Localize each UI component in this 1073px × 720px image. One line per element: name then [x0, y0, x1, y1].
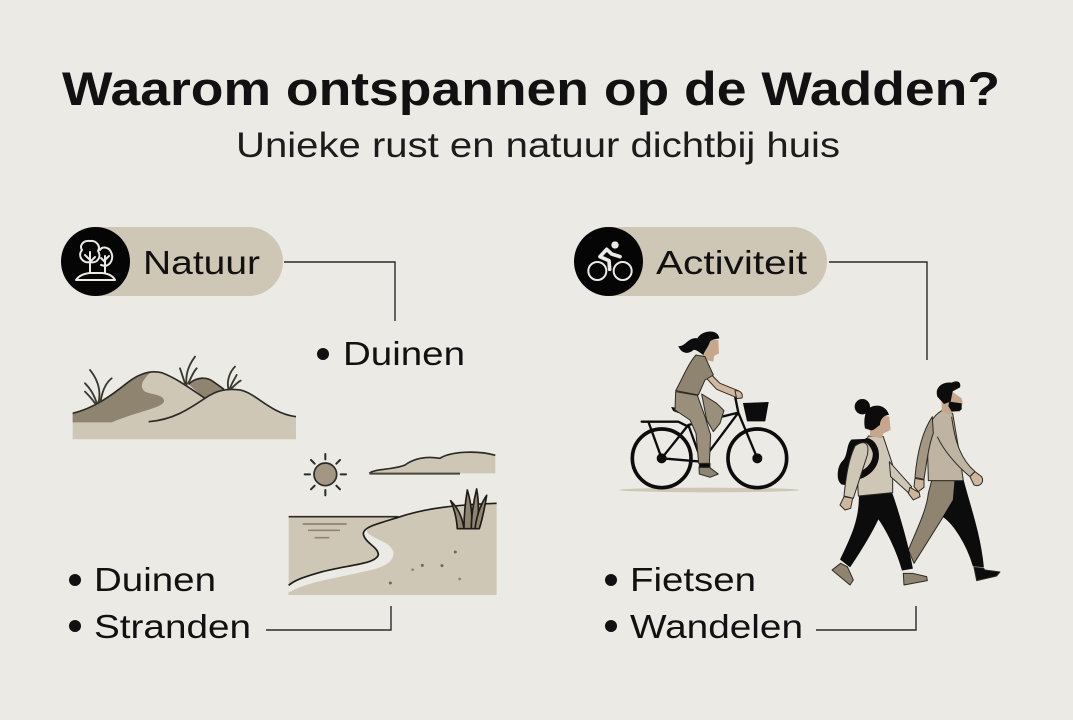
illustration: cyclist	[619, 331, 799, 492]
connector: Wandelen to walkers	[816, 606, 916, 630]
list: Fietsen and Wandelen	[605, 561, 803, 645]
bicycle	[632, 396, 787, 488]
list: Fietsen and Wandelen: Wandelen	[630, 608, 803, 645]
panel: Natuur heading pill	[61, 227, 283, 296]
woman	[832, 415, 927, 585]
list: Duinen: Duinen	[343, 335, 465, 372]
man	[908, 411, 1000, 581]
panel: Activiteit heading pill	[574, 227, 827, 296]
list: Duinen and Stranden: Stranden	[94, 608, 251, 645]
list: Fietsen and Wandelen: Fietsen	[630, 561, 756, 598]
icon: trees	[76, 241, 115, 280]
rider	[675, 331, 742, 477]
illustration: walkers	[832, 381, 1000, 585]
panel: Activiteit heading pill: Activiteit	[656, 244, 807, 281]
title: Waarom ontspannen op de Wadden?	[62, 62, 1000, 115]
subtitle: Unieke rust en natuur dichtbij huis	[236, 126, 840, 165]
connector: Natuur to Duinen	[284, 262, 395, 321]
sand dots	[389, 550, 461, 584]
icon: grass tufts	[85, 357, 241, 403]
list: Duinen and Stranden	[69, 561, 251, 645]
panel: Natuur heading pill: Natuur	[143, 244, 260, 281]
illustration: beach landscape	[289, 452, 497, 595]
connector: Stranden to beach	[266, 606, 391, 630]
icon: cyclist	[588, 241, 632, 280]
illustration: dunes	[73, 357, 296, 439]
connector: Activiteit to walkers	[829, 262, 927, 360]
icon: beach grass	[451, 489, 487, 529]
list: Duinen and Stranden: Duinen	[94, 561, 216, 598]
icon: sun	[305, 454, 346, 495]
